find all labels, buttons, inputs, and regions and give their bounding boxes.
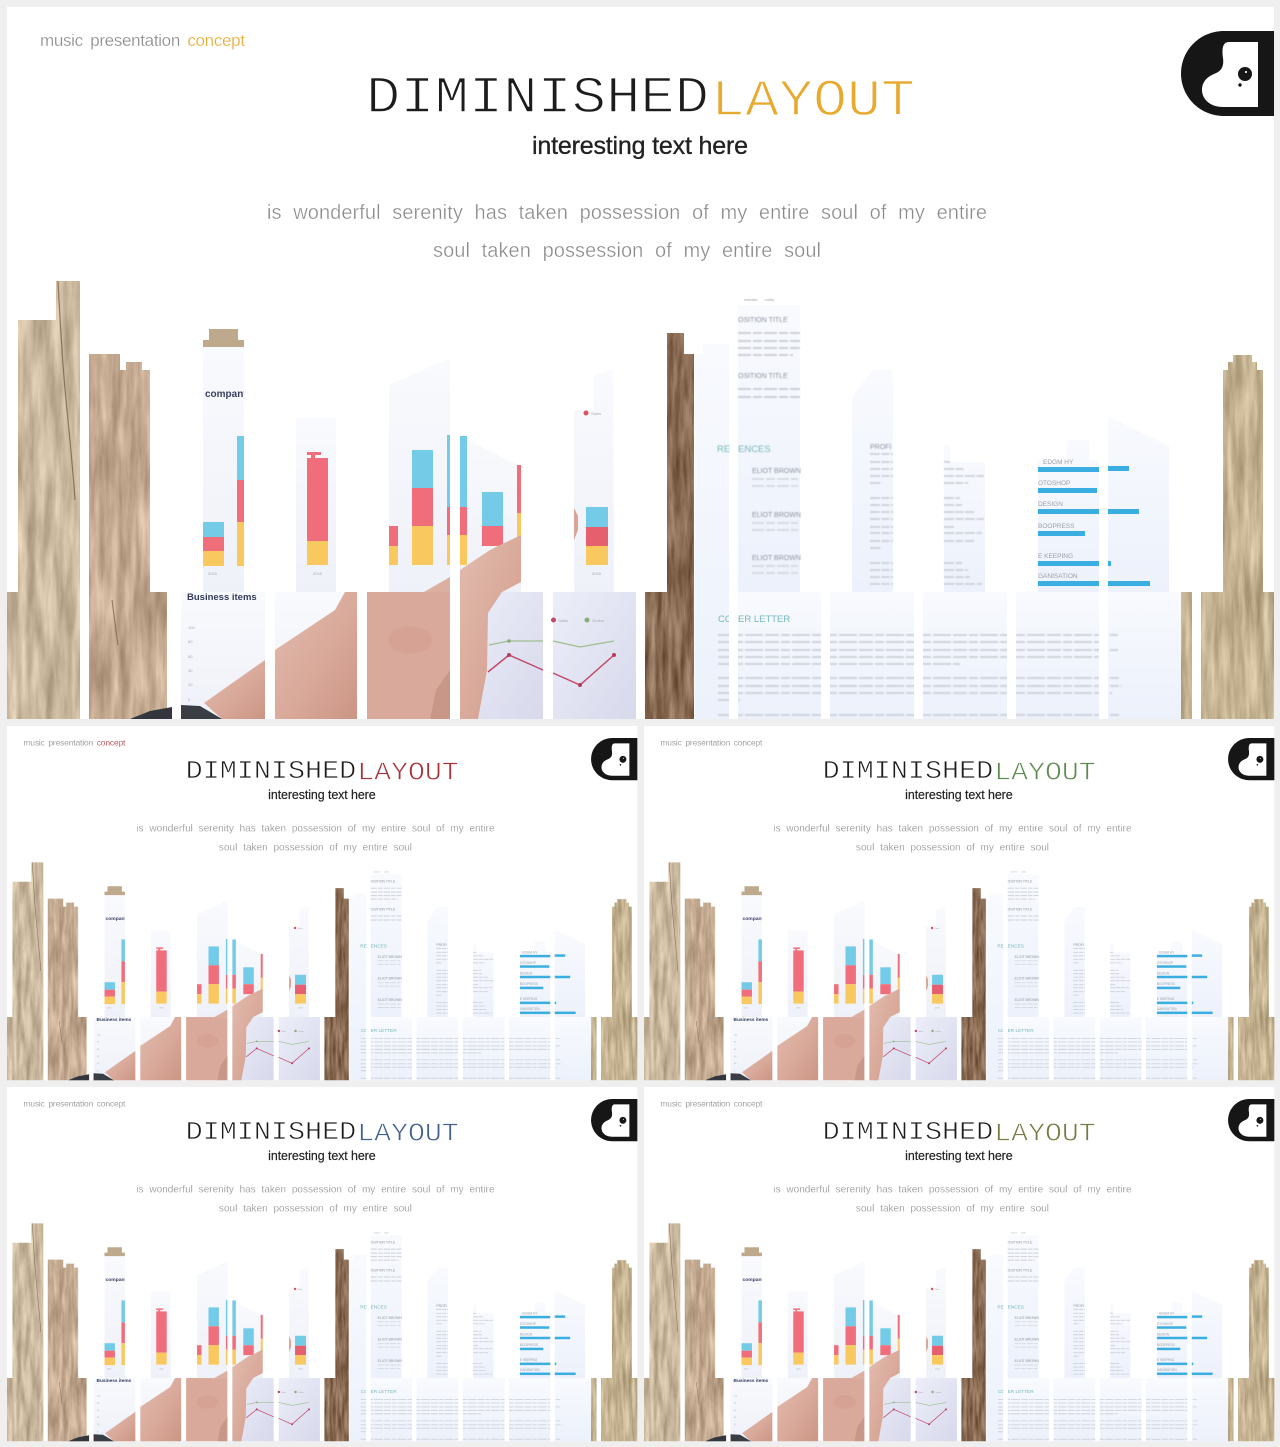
skyline: wooden tower right — [1201, 355, 1274, 719]
slide scene — [7, 726, 637, 1080]
skyline: resume columns: ELIOT BROWN — [752, 468, 801, 475]
body text — [773, 1184, 1132, 1214]
body text: soul taken possession of my entire soul — [856, 1203, 1049, 1214]
skyline: skills column with blue bars — [1038, 416, 1169, 592]
skyline: resume columns: OSITION TITLE — [738, 317, 788, 324]
skyline: profile column: PROFI — [870, 444, 891, 451]
slide scene — [7, 1087, 637, 1441]
panel: olive variant slide — [644, 1087, 1274, 1441]
lower panel: business items: 40 — [188, 668, 193, 673]
lower panel: business items: 0 — [188, 697, 191, 702]
slide scene — [644, 1087, 1274, 1441]
slide scene — [644, 726, 1274, 1080]
tagline: music presentation concept — [23, 737, 126, 747]
lower panel: chart and finger — [460, 535, 543, 719]
skyline: paper column with legend — [574, 369, 614, 592]
lower panels: cover letter: CO — [718, 614, 732, 625]
skyline: resume columns: OSITION TITLE — [738, 373, 788, 380]
body text: is wonderful serenity has taken possession of my entire soul of my entire — [136, 1184, 495, 1195]
skyline: wooden block 2 — [89, 354, 167, 719]
body text: soul taken possession of my entire soul — [433, 240, 821, 262]
panel: green variant slide — [644, 726, 1274, 1080]
tagline: music presentation concept — [660, 737, 763, 747]
lower panel: line chart legend — [551, 592, 636, 719]
body text: soul taken possession of my entire soul — [219, 842, 412, 853]
body text — [773, 823, 1132, 853]
skyline: skills column with blue bars: BOOPRESS — [1038, 523, 1075, 530]
skyline: resume columns: RE — [717, 444, 730, 455]
title: DIMINISHED — [823, 1117, 993, 1147]
tagline: music presentation concept — [23, 1098, 126, 1108]
skyline: paper column with bars, company: 2015 — [208, 571, 218, 576]
panel: blue variant slide — [7, 1087, 637, 1441]
wooden sliver — [1181, 592, 1192, 719]
lower panels: cover letter — [718, 592, 1181, 719]
skyline: wooden block 1 — [7, 281, 80, 719]
skyline: text column — [944, 445, 985, 592]
subtitle: interesting text here — [532, 132, 748, 160]
skyline: profile column — [852, 370, 893, 592]
watch strap — [130, 705, 222, 719]
skyline: paper column with legend: Sales — [591, 411, 601, 416]
body text: is wonderful serenity has taken possession of my entire soul of my entire — [136, 823, 495, 834]
lower panel: business items — [181, 592, 265, 719]
lower panel: line chart legend: Orders — [592, 618, 604, 623]
body text: is wonderful serenity has taken possession of my entire soul of my entire — [267, 202, 987, 224]
skyline: skills column with blue bars: EDGM HY — [1043, 459, 1074, 466]
title: DIMINISHED — [186, 756, 356, 786]
skyline: resume columns — [695, 297, 801, 719]
skyline: skills column with blue bars: GANISATION — [1038, 573, 1078, 580]
title accent: LAYOUT — [711, 72, 915, 131]
skyline: paper column with red bar: 2016 — [313, 571, 323, 576]
lower panel: hand 1 — [275, 592, 357, 719]
lower panel: line chart legend: Sales — [558, 618, 568, 623]
skyline: paper column with stacked bars — [389, 358, 450, 592]
title accent: LAYOUT — [357, 1119, 459, 1149]
skyline: paper column with bars, company — [203, 329, 249, 592]
body text — [267, 202, 987, 262]
skyline: resume columns: website notify — [744, 297, 774, 302]
skyline: skills column with blue bars: OTOSHOP — [1038, 480, 1070, 487]
skyline: skills column with blue bars: DESIGN — [1038, 501, 1063, 508]
subtitle: interesting text here — [268, 1149, 376, 1163]
skyline: resume columns: ENCES — [738, 444, 771, 455]
skyline: skills column with blue bars: E KEEPING — [1038, 553, 1073, 560]
logo — [1181, 31, 1274, 116]
body text: soul taken possession of my entire soul — [219, 1203, 412, 1214]
skyline: resume columns: ELIOT BROWN — [752, 555, 801, 562]
body text: is wonderful serenity has taken possession of my entire soul of my entire — [773, 823, 1132, 834]
title: DIMINISHED — [366, 69, 709, 128]
tagline: music presentation concept — [660, 1098, 763, 1108]
lower panel: business items: 100 — [188, 625, 195, 630]
scene: skyline collage with logo — [7, 7, 1274, 719]
panel: main slide — [7, 7, 1274, 719]
tagline: music presentation concept — [40, 31, 245, 50]
slide background — [7, 7, 1274, 719]
body text — [136, 823, 495, 853]
skyline: dark wooden block — [645, 333, 694, 719]
skyline: paper column with red bar — [296, 418, 336, 592]
title: DIMINISHED — [186, 1117, 356, 1147]
skyline: paper column with finger — [460, 436, 521, 592]
lower panel: business items: 20 — [188, 682, 193, 687]
title accent: LAYOUT — [994, 758, 1096, 788]
lower panels: cover letter: ER LETTER — [738, 614, 790, 625]
body text: is wonderful serenity has taken possession of my entire soul of my entire — [773, 1184, 1132, 1195]
subtitle: interesting text here — [905, 788, 1013, 802]
skyline: paper column with bars, company: company — [205, 389, 249, 400]
title accent: LAYOUT — [357, 758, 459, 788]
body text — [136, 1184, 495, 1214]
lower panel: hand 2 — [367, 592, 450, 719]
skyline: resume columns: ELIOT BROWN — [752, 512, 801, 519]
lower panel: business items: 60 — [188, 654, 193, 659]
title: DIMINISHED — [823, 756, 993, 786]
lower panel: business items: Business items — [187, 592, 257, 603]
panel: red variant slide — [7, 726, 637, 1080]
body text: soul taken possession of my entire soul — [856, 842, 1049, 853]
subtitle: interesting text here — [905, 1149, 1013, 1163]
skyline: paper column with legend: 2018 — [592, 571, 602, 576]
title accent: LAYOUT — [994, 1119, 1096, 1149]
lower panel: business items: 80 — [188, 639, 193, 644]
subtitle: interesting text here — [268, 788, 376, 802]
